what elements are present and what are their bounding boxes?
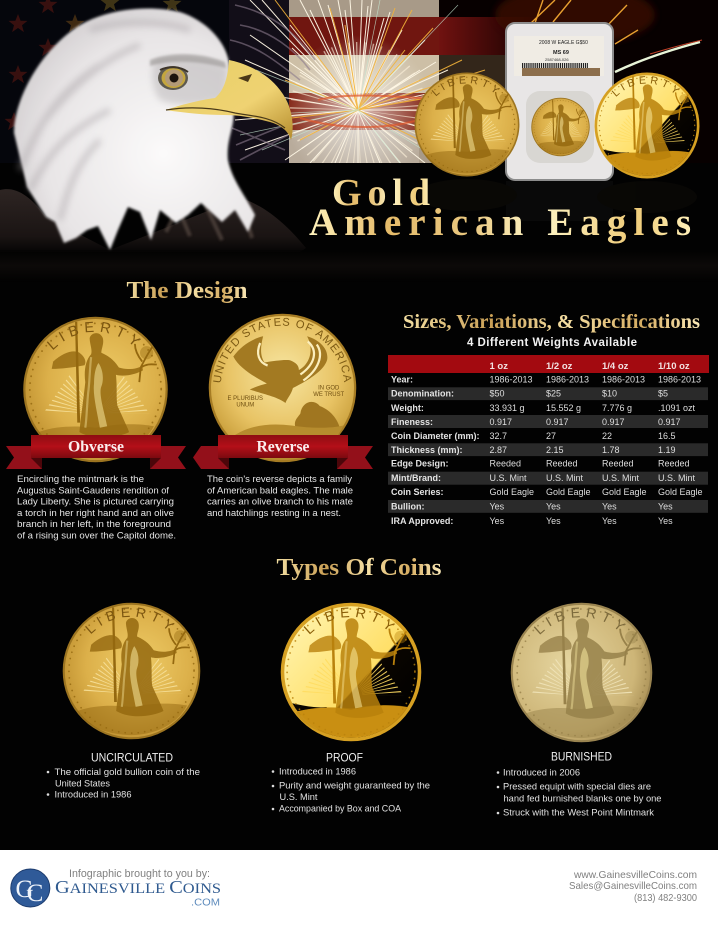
list: uncirculated facts xyxy=(47,766,200,799)
ribbon: obverse xyxy=(6,435,186,469)
text: obverse description: Augustus Saint-Gaudens rendition of xyxy=(17,485,169,496)
row: fineness: 0.917 xyxy=(658,417,681,427)
heading: Sizes, Variations, & Specifications: Sizes, Variations, & Specifications xyxy=(403,311,700,333)
row: weight: Weight: xyxy=(391,403,424,413)
row: bullion: Yes xyxy=(602,502,617,512)
row: denomination: Denomination: xyxy=(391,389,454,399)
list: uncirculated facts: Introduced in 1986 xyxy=(54,788,132,799)
text: obverse description: branch in her left, in the foreground xyxy=(17,519,171,530)
coin: reverse: E PLURIBUS xyxy=(228,396,263,402)
slab label xyxy=(514,36,604,76)
coin: reverse: IN GOD xyxy=(318,385,340,392)
flag and star background xyxy=(0,0,718,163)
row: IRA approved: Yes xyxy=(546,516,561,526)
text: reverse description: and hatchlings resting in a nest. xyxy=(207,508,341,519)
text: reverse description: The coin's reverse depicts a family xyxy=(207,474,352,485)
text: Gainesville Coins wordmark: GAINESVILLE COINS xyxy=(55,877,221,897)
row: mint/brand: U.S. Mint xyxy=(490,473,527,483)
row: bullion: Yes xyxy=(658,502,673,512)
list: burnished facts xyxy=(497,766,662,818)
row: mint/brand: U.S. Mint xyxy=(546,473,584,483)
eagle body xyxy=(0,189,306,252)
decorative reflection band xyxy=(0,250,718,282)
coin: burnished: LIBERTY xyxy=(534,608,626,634)
panel: burnished xyxy=(496,602,662,818)
list: proof facts: Accompanied by Box and COA xyxy=(279,803,402,814)
row: IRA approved: IRA Approved: xyxy=(391,516,453,526)
row: weight: 7.776 g xyxy=(602,403,632,413)
row: year: 1986-2013 xyxy=(658,375,701,385)
row: mint/brand xyxy=(388,472,708,485)
coin: uncirculated xyxy=(62,602,200,740)
row: coin diameter xyxy=(391,431,676,441)
table header: 1 oz xyxy=(490,361,508,372)
list: burnished facts: hand fed burnished blanks one by one xyxy=(504,792,662,803)
list: proof facts: U.S. Mint xyxy=(280,791,318,802)
row: bullion: Bullion: xyxy=(391,502,424,512)
list: proof facts: Introduced in 1986 xyxy=(279,765,356,776)
row: coin series: Gold Eagle xyxy=(546,487,591,497)
panel: footer xyxy=(0,850,718,929)
coin: hero proof: LIBERTY xyxy=(612,76,680,97)
table: specifications xyxy=(388,355,709,526)
text: reverse description xyxy=(207,474,353,519)
row: mint/brand: Mint/Brand: xyxy=(391,473,441,483)
ribbon: reverse: Reverse xyxy=(256,438,310,456)
row: coin diameter: 27 xyxy=(546,431,556,441)
row: bullion xyxy=(388,500,708,513)
table header xyxy=(388,355,709,373)
table header: 1/4 oz xyxy=(602,361,629,372)
coin: uncirculated: LIBERTY xyxy=(85,607,175,634)
fireworks xyxy=(230,0,702,163)
icon: Gainesville Coins logo: G xyxy=(15,876,34,903)
text: .COM: .COM xyxy=(191,898,220,909)
text: contact details: (813) 482-9300 xyxy=(634,892,697,904)
ribbon: reverse xyxy=(193,435,373,469)
title: Gold American Eagles xyxy=(309,172,691,244)
row: thickness: Thickness (mm): xyxy=(391,445,463,455)
panel: hero banner xyxy=(0,0,702,251)
table header: 1/10 oz xyxy=(658,361,690,372)
row: IRA approved: Yes xyxy=(490,516,505,526)
row: coin series: Coin Series: xyxy=(391,487,444,497)
panel: reverse xyxy=(193,314,373,519)
row: thickness: 1.19 xyxy=(658,445,676,455)
icon: Gainesville Coins logo: C xyxy=(27,880,43,907)
row: year: Year: xyxy=(391,375,413,385)
coin: obverse xyxy=(23,316,168,462)
row: fineness: 0.917 xyxy=(546,417,569,427)
coin: reverse: WE TRUST xyxy=(313,392,345,398)
row: mint/brand: U.S. Mint xyxy=(658,473,696,483)
icon: Gainesville Coins logo xyxy=(11,869,50,907)
text: obverse description: Encircling the mintmark is the xyxy=(17,474,144,485)
row: IRA approved: Yes xyxy=(658,516,673,526)
list: burnished facts: Struck with the West Point Mintmark xyxy=(503,807,654,818)
row: edge design xyxy=(391,459,690,469)
row: year xyxy=(391,375,701,385)
ribbon: obverse: Obverse xyxy=(68,438,124,456)
coin: obverse: LIBERTY xyxy=(46,322,141,350)
coin: proof xyxy=(280,602,422,742)
heading: The Design: The Design xyxy=(126,278,248,304)
row: coin series xyxy=(391,487,703,497)
row: weight xyxy=(391,403,696,413)
row: coin diameter: 22 xyxy=(602,431,612,441)
row: weight: 15.552 g xyxy=(546,403,581,413)
eagle head feathers xyxy=(14,8,255,250)
slab label: 2587468-026 xyxy=(545,57,569,62)
slab with coin xyxy=(506,23,613,180)
row: thickness: 1.78 xyxy=(602,445,620,455)
row: denomination: $25 xyxy=(546,389,561,399)
coin: hero uncirculated xyxy=(414,72,520,176)
list: proof facts: Purity and weight guaranteed by the xyxy=(279,780,430,791)
row: coin series: Gold Eagle xyxy=(602,487,647,497)
heading: Types Of Coins: Types Of Coins xyxy=(276,555,442,581)
reflection under coins xyxy=(417,179,697,221)
coin: proof: LIBERTY xyxy=(304,608,396,634)
row: year: 1986-2013 xyxy=(602,375,645,385)
row: thickness xyxy=(388,443,708,456)
text: brought to you by: Infographic brought to you by: xyxy=(69,868,210,880)
panel: proof xyxy=(272,602,430,814)
coin: hero proof xyxy=(594,72,700,178)
row: fineness xyxy=(388,415,708,428)
coin: hero uncirculated: LIBERTY xyxy=(432,76,500,96)
coin: reverse: UNUM xyxy=(236,403,254,409)
row: thickness: 2.15 xyxy=(546,445,564,455)
text: contact details: www.GainesvilleCoins.com xyxy=(573,869,697,881)
row: bullion: Yes xyxy=(490,502,505,512)
title: Gold American Eagles: American Eagles xyxy=(309,201,691,244)
icon: bald eagle xyxy=(0,8,306,252)
eagle beak xyxy=(166,60,293,140)
row: edge design: Edge Design: xyxy=(391,459,449,469)
row: weight: .1091 ozt xyxy=(658,403,696,413)
row: coin diameter: 32.7 xyxy=(490,431,507,441)
text: contact details xyxy=(569,869,697,904)
list: uncirculated facts: The official gold bullion coin of the xyxy=(54,766,200,777)
row: bullion: Yes xyxy=(546,502,561,512)
coin: reverse: UNITED STATES OF AMERICA xyxy=(213,318,352,382)
text: obverse description xyxy=(17,474,176,541)
row: mint/brand: U.S. Mint xyxy=(602,473,640,483)
row: thickness: 2.87 xyxy=(490,445,507,455)
text: reverse description: carries an olive branch to his mate xyxy=(207,497,353,508)
row: edge design: Reeded xyxy=(602,459,634,469)
row: IRA approved: Yes xyxy=(602,516,617,526)
row: year: 1986-2013 xyxy=(490,375,533,385)
coin: reverse xyxy=(208,314,356,462)
row: edge design: Reeded xyxy=(546,459,578,469)
eagle brow xyxy=(150,54,226,68)
row: fineness: 0.917 xyxy=(490,417,512,427)
text: obverse description: of a rising sun over the Capitol dome. xyxy=(17,530,176,541)
row: fineness: 0.917 xyxy=(602,417,625,427)
text: contact details: Sales@GainesvilleCoins.com xyxy=(569,880,697,892)
list: burnished facts: Introduced in 2006 xyxy=(503,766,580,777)
panel: uncirculated xyxy=(46,602,200,799)
row: edge design: Reeded xyxy=(658,459,690,469)
table header: 1/2 oz xyxy=(546,361,573,372)
row: coin diameter: Coin Diameter (mm): xyxy=(391,431,480,441)
row: coin series: Gold Eagle xyxy=(658,487,703,497)
row: denomination xyxy=(388,387,708,400)
slab label: 2008 W EAGLE G$50 xyxy=(539,40,588,46)
label: proof: PROOF xyxy=(326,753,363,765)
list: burnished facts: Pressed equipt with special dies are xyxy=(503,781,651,792)
row: fineness: Fineness: xyxy=(391,417,433,427)
row: denomination: $10 xyxy=(602,389,617,399)
row: denomination: $50 xyxy=(490,389,505,399)
panel: obverse xyxy=(6,316,186,541)
label: burnished: BURNISHED xyxy=(551,752,612,764)
coin: burnished xyxy=(510,602,652,742)
row: year: 1986-2013 xyxy=(546,375,589,385)
slab label: MS 69 xyxy=(553,50,569,56)
text: reverse description: of American bald eagles. The male xyxy=(207,485,353,496)
row: coin diameter: 16.5 xyxy=(658,431,676,441)
eagle eye xyxy=(158,66,188,90)
row: edge design: Reeded xyxy=(490,459,521,469)
row: coin series: Gold Eagle xyxy=(490,487,534,497)
list: uncirculated facts: United States xyxy=(55,778,110,789)
row: denomination: $5 xyxy=(658,389,668,399)
text: obverse description: Lady Liberty. She is pictured carrying xyxy=(17,497,174,508)
list: proof facts xyxy=(272,765,430,814)
label: uncirculated: UNCIRCULATED xyxy=(91,753,173,765)
title: Gold American Eagles: Gold xyxy=(332,172,430,214)
subheading: 4 Different Weights Available: 4 Different Weights Available xyxy=(467,337,637,349)
row: IRA approved xyxy=(391,516,673,526)
row: weight: 33.931 g xyxy=(490,403,525,413)
text: obverse description: a torch in her right hand and an olive xyxy=(17,508,174,519)
